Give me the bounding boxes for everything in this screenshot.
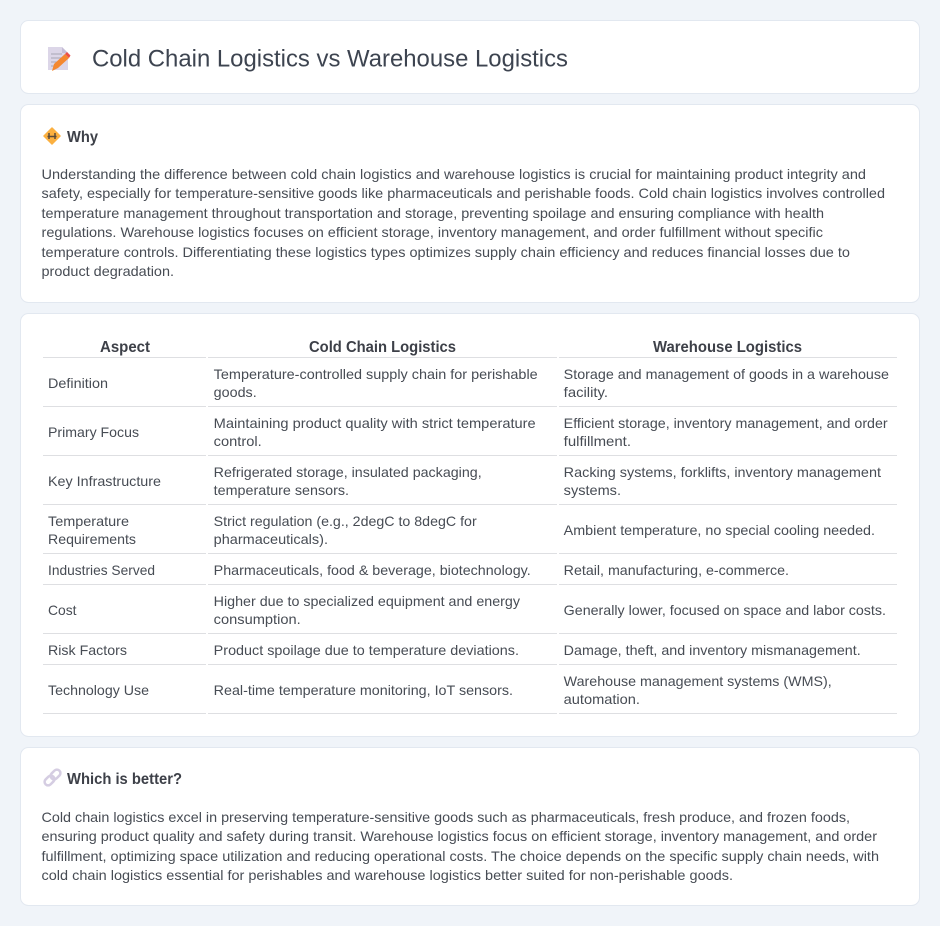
- table row: cost: [43, 593, 897, 634]
- table row: definition: Temperature-controlled supply chain for perishable: [214, 366, 538, 382]
- table row: temperature requirements: Strict regulation (e.g., 2degC to 8degC for: [214, 513, 477, 529]
- table row: temperature requirements: pharmaceuticals).: [214, 531, 328, 547]
- table header row: Aspect: [100, 339, 151, 356]
- text block: which is better paragraph: fulfillment, optimizing space utilization and reducing operational costs. The choice depends on the specific supply chain needs, with: [42, 848, 879, 864]
- table row: temperature requirements: Ambient temperature, no special cooling needed.: [564, 522, 875, 538]
- text block: why paragraph: [42, 166, 885, 279]
- table row: technology use: automation.: [564, 691, 640, 707]
- table row: key infrastructure: Racking systems, forklifts, inventory management: [564, 464, 881, 480]
- table row: primary focus: Efficient storage, inventory management, and order: [564, 415, 888, 431]
- text block: why paragraph: temperature controls. Differentiating these logistics types optimizes supply chain efficiency and reduces financial losses due to: [42, 244, 850, 260]
- text block: why paragraph: regulations. Warehouse logistics focuses on efficient storage, inventory management, and order fulfillment without specific: [42, 224, 823, 240]
- heading: why: Why: [67, 129, 98, 146]
- table row: cost: Cost: [48, 602, 77, 618]
- table row: definition: facility.: [564, 384, 608, 400]
- table row: primary focus: control.: [214, 433, 262, 449]
- table row: technology use: Real-time temperature monitoring, IoT sensors.: [214, 682, 513, 698]
- table row: primary focus: [43, 415, 897, 456]
- table row: key infrastructure: Key Infrastructure: [48, 473, 161, 489]
- text block: which is better paragraph: cold chain logistics essential for perishables and warehouse logistics better suited for non-perishable goods.: [42, 867, 733, 883]
- table row: industries served: Industries Served: [48, 562, 155, 578]
- table row: definition: Storage and management of goods in a warehouse: [564, 366, 889, 382]
- table row: industries served: Pharmaceuticals, food & beverage, biotechnology.: [214, 562, 531, 578]
- icon: memo with pencil: [48, 47, 70, 71]
- panel: comparison table: [20, 314, 920, 736]
- title: Cold Chain Logistics vs Warehouse Logistics: [92, 46, 568, 72]
- text block: why paragraph: temperature management throughout transportation and storage, preventing spoilage and ensuring compliance with health: [42, 205, 824, 221]
- table row: key infrastructure: systems.: [564, 482, 621, 498]
- panel: why: [20, 104, 920, 302]
- table row: definition: goods.: [214, 384, 257, 400]
- text block: why paragraph: product degradation.: [42, 263, 174, 279]
- table row: cost: Generally lower, focused on space and labor costs.: [564, 602, 886, 618]
- table row: primary focus: fulfillment.: [564, 433, 631, 449]
- table row: risk factors: Product spoilage due to temperature deviations.: [214, 642, 519, 658]
- table row: primary focus: Maintaining product quality with strict temperature: [214, 415, 536, 431]
- table row: risk factors: [43, 642, 897, 665]
- table row: industries served: Retail, manufacturing, e-commerce.: [564, 562, 789, 578]
- table row: definition: Definition: [48, 375, 108, 391]
- table row: technology use: Warehouse management systems (WMS),: [564, 673, 832, 689]
- table row: key infrastructure: Refrigerated storage, insulated packaging,: [214, 464, 482, 480]
- icon: diamond sign: [44, 128, 60, 144]
- text block: why paragraph: safety, especially for temperature-sensitive goods like pharmaceuticals and perishable foods. Cold chain logistics involves controlled: [42, 185, 885, 201]
- table row: temperature requirements: [43, 513, 897, 554]
- table row: key infrastructure: temperature sensors.: [214, 482, 349, 498]
- panel: title header: [20, 20, 920, 94]
- table row: technology use: [43, 673, 897, 714]
- text block: why paragraph: Understanding the difference between cold chain logistics and warehouse logistics is crucial for maintaining product integrity and: [42, 166, 866, 182]
- table row: industries served: [43, 562, 897, 585]
- heading: which is better: Which is better?: [67, 771, 182, 788]
- text block: which is better paragraph: Cold chain logistics excel in preserving temperature-sensitive goods such as pharmaceuticals, fresh produce, and frozen foods,: [42, 809, 850, 825]
- table row: primary focus: Primary Focus: [48, 424, 139, 440]
- table row: risk factors: Damage, theft, and inventory mismanagement.: [564, 642, 861, 658]
- table row: cost: Higher due to specialized equipment and energy: [214, 593, 520, 609]
- table row: risk factors: Risk Factors: [48, 642, 127, 658]
- table row: temperature requirements: Requirements: [48, 531, 136, 547]
- table header row: Warehouse Logistics: [653, 339, 802, 356]
- table row: technology use: Technology Use: [48, 682, 149, 698]
- table row: cost: consumption.: [214, 611, 301, 627]
- table header row: Cold Chain Logistics: [309, 339, 456, 356]
- table row: temperature requirements: Temperature: [48, 513, 129, 529]
- text block: which is better paragraph: ensuring product quality and safety during transit. Warehouse logistics focus on efficient storage, inventory management, and order: [42, 828, 877, 844]
- text block: which is better paragraph: [42, 809, 879, 883]
- table header row: [43, 339, 897, 358]
- table row: key infrastructure: [43, 464, 897, 505]
- table row: definition: [43, 366, 897, 407]
- panel: which is better: [20, 748, 920, 906]
- icon: chain link: [43, 768, 62, 787]
